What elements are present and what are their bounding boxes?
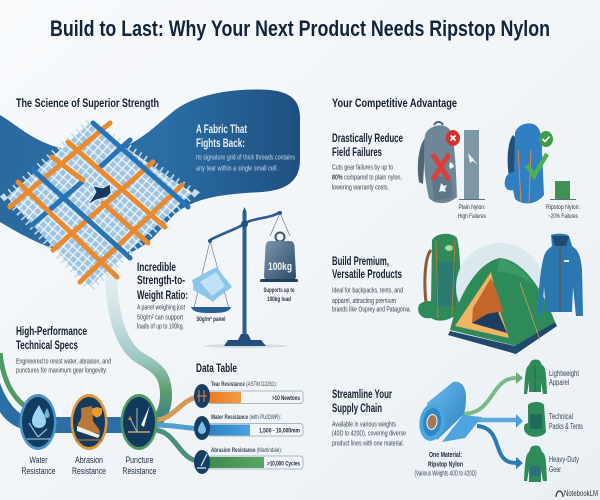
- bar: plain nylon failures: Plain Nylon:: [458, 204, 486, 211]
- label: puncture resistance: [122, 455, 156, 476]
- icon: tent: [448, 243, 557, 354]
- text block: streamline supply chain: Supply Chain: [332, 401, 382, 415]
- text block: reduce field failures: Cuts gear failures by up to: [332, 162, 393, 172]
- text block: streamline supply chain: (40D to 420D), covering diverse: [332, 428, 406, 438]
- data row: water resistance: [194, 414, 303, 440]
- icon: green apparel: [524, 360, 547, 394]
- text block: streamline supply chain: Available in various weights: [332, 420, 396, 428]
- text block: build premium products: Build Premium,: [332, 254, 389, 268]
- text block: high-performance technical specs: [16, 324, 111, 374]
- icon: green backpack: [418, 234, 460, 321]
- heading: your competitive advantage: Your Competitive Advantage: [332, 96, 457, 110]
- heading: data table: Data Table: [196, 361, 237, 375]
- data row: abrasion resistance: [194, 447, 303, 474]
- text block: build premium products: apparel, attracting premium: [332, 296, 396, 305]
- text block: strength to weight ratio: 50g/m² can support: [137, 312, 184, 322]
- label: supports load: Supports up to: [264, 288, 295, 294]
- label: water resistance: Resistance: [22, 466, 56, 476]
- bar: ripstop nylon failures: Ripstop Nylon:: [546, 204, 580, 211]
- label: one material: Ripstop Nylon: [428, 462, 463, 468]
- callout: a fabric that fights back: [196, 122, 295, 172]
- label: one material: [414, 452, 476, 478]
- text block: reduce field failures: 80% compared to plain nylon,: [332, 172, 402, 182]
- icon: damaged gray backpack: [418, 122, 460, 203]
- bar: plain nylon failures: [458, 130, 487, 220]
- label: one material: (Various Weights 40D to 420D): [414, 470, 476, 478]
- text block: streamline supply chain: Streamline Your: [332, 387, 392, 401]
- callout: a fabric that fights back: Its signature grid of thick threads contains: [196, 152, 295, 162]
- label: technical packs and tents: Packs & Tents: [549, 422, 583, 431]
- callout: a fabric that fights back: any tear within a single small cell.: [196, 164, 278, 172]
- bar: ripstop nylon failures: ~20% Failures: [548, 213, 579, 220]
- data row: tear resistance: >10 Newtons: [272, 395, 300, 402]
- text block: reduce field failures: [332, 131, 403, 192]
- icon: water resistance: [20, 394, 56, 450]
- label: puncture resistance: Resistance: [122, 466, 156, 476]
- label: puncture resistance: Puncture: [126, 455, 154, 465]
- label: heavy-duty gear: [549, 455, 579, 474]
- label: panel weight: 50g/m² panel: [196, 316, 226, 323]
- panel: flow ribbon to specs: [111, 255, 166, 424]
- label: heavy-duty gear: Gear: [549, 465, 561, 474]
- bar: ripstop nylon failures: [546, 181, 580, 220]
- icon: fabric roll: [417, 382, 482, 443]
- data row: tear resistance: [194, 381, 303, 408]
- label: lightweight apparel: Apparel: [549, 378, 569, 387]
- bar: plain nylon failures: High Failures: [458, 213, 487, 220]
- label: supports load: 100kg load: [267, 297, 291, 303]
- label: one material: One Material:: [429, 452, 462, 459]
- text block: strength to weight ratio: A panel weighing just: [137, 302, 186, 312]
- label: abrasion resistance: Abrasion: [75, 455, 103, 465]
- icon: abrasion resistance: [70, 394, 108, 450]
- label: water resistance: [22, 455, 56, 476]
- icon: blue ripstop backpack: [505, 123, 553, 203]
- icon: blue jacket: [538, 234, 583, 316]
- label: lightweight apparel: [549, 369, 580, 387]
- text block: high-performance technical specs: High-Performance: [16, 324, 87, 338]
- label: water resistance: Water: [30, 455, 48, 465]
- flow: spec band: [0, 353, 204, 462]
- text block: strength to weight ratio: Incredible: [137, 260, 176, 274]
- data row: water resistance: Water Resistance (with PU/DWR):: [211, 414, 281, 421]
- label: 100kg: 100kg: [268, 261, 292, 273]
- data row: abrasion resistance: Abrasion Resistance (Martindale):: [211, 447, 282, 454]
- icon: green pack: [524, 402, 546, 437]
- icon: puncture resistance: [120, 394, 158, 450]
- callout: a fabric that fights back: A Fabric That: [196, 122, 247, 136]
- label: technical packs and tents: [549, 412, 583, 431]
- label: technical packs and tents: Technical: [549, 412, 573, 421]
- text block: reduce field failures: Drastically Reduce: [332, 131, 403, 145]
- data row: water resistance: 1,500 - 10,000mm: [259, 428, 300, 434]
- label: abrasion resistance: Resistance: [72, 466, 106, 476]
- text block: streamline supply chain: product lines with one material.: [332, 438, 404, 448]
- text block: high-performance technical specs: Engineered to resist water, abrasion, and: [16, 356, 111, 366]
- arrows: material to products: [462, 372, 523, 469]
- text block: strength to weight ratio: Strength-to-: [137, 273, 185, 287]
- text block: strength to weight ratio: [137, 260, 188, 330]
- text block: reduce field failures: Field Failures: [332, 145, 382, 159]
- panel: blue ribbon: [0, 90, 300, 258]
- text block: strength to weight ratio: Weight Ratio:: [137, 288, 188, 302]
- label: lightweight apparel: Lightweight: [549, 369, 580, 378]
- heading: science of superior strength: The Science of Superior Strength: [16, 96, 159, 110]
- label: supports load: [264, 288, 295, 303]
- text block: high-performance technical specs: punctures for maximum gear longevity.: [16, 366, 107, 374]
- text block: reduce field failures: lowering warranty costs.: [332, 182, 389, 192]
- data row: tear resistance: Tear Resistance (ASTM D2261):: [211, 381, 277, 388]
- data row: abrasion resistance: >10,000 Cycles: [267, 460, 300, 468]
- text block: build premium products: [332, 254, 411, 314]
- text block: build premium products: Versatile Products: [332, 267, 402, 281]
- icon: balance scale: [191, 207, 298, 348]
- text block: streamline supply chain: [332, 387, 406, 448]
- text block: build premium products: Ideal for backpacks, tents, and: [332, 286, 403, 294]
- label: heavy-duty gear: Heavy-Duty: [549, 455, 579, 464]
- callout: a fabric that fights back: Fights Back:: [196, 136, 245, 150]
- label: abrasion resistance: [72, 455, 106, 476]
- icon: heavy-duty gear: [524, 446, 547, 482]
- text block: high-performance technical specs: Technical Specs: [16, 338, 78, 352]
- graphic: ripstop fabric grid: [7, 123, 192, 287]
- text block: strength to weight ratio: loads of up to 100kg.: [137, 322, 184, 330]
- text block: build premium products: brands like Osprey and Patagonia.: [332, 304, 411, 314]
